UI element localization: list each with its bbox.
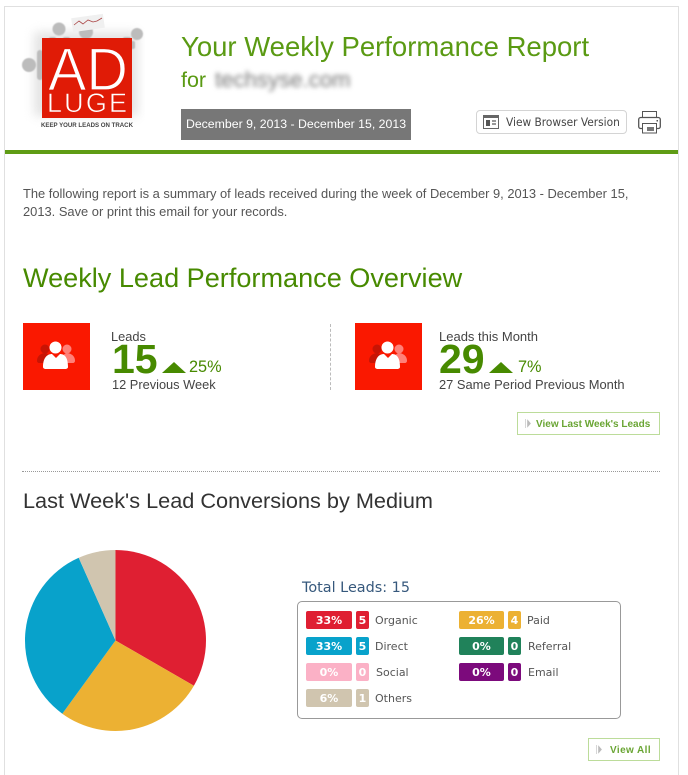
logo xyxy=(22,14,144,129)
legend: paid: Paid xyxy=(527,614,550,627)
slice: organic xyxy=(116,550,206,686)
legend: organic xyxy=(306,611,418,629)
legend: social: 0% xyxy=(320,666,338,679)
slice: others xyxy=(79,550,116,640)
red logo square xyxy=(42,38,132,118)
legend: organic: 5 xyxy=(359,614,366,627)
legend: email xyxy=(459,663,559,681)
legend: paid: 4 xyxy=(511,614,518,627)
metric label: Leads this Month xyxy=(439,329,538,344)
view last week's leads button: View Last Week's Leads xyxy=(536,419,650,430)
date range badge xyxy=(181,109,411,140)
metric label: Leads xyxy=(111,329,146,344)
up arrow xyxy=(489,362,513,373)
percent change: 7% xyxy=(518,358,542,376)
legend: direct: Direct xyxy=(375,640,408,653)
logo shadow xyxy=(34,32,138,116)
section divider xyxy=(22,471,660,472)
metric value: 29 xyxy=(439,336,485,382)
legend: organic: 33% xyxy=(316,614,342,627)
same period previous month: 27 Same Period Previous Month xyxy=(439,377,625,392)
intro paragraph: The following report is a summary of leads received during the week of December 9, 2013 - December 15, xyxy=(23,186,628,201)
date range badge: December 9, 2013 - December 15, 2013 xyxy=(186,117,406,131)
slice: direct xyxy=(25,558,115,714)
legend: email: Email xyxy=(528,666,559,679)
view browser version button xyxy=(476,110,627,134)
icon: people on red square xyxy=(355,323,422,390)
legend panel xyxy=(297,601,621,719)
legend: social: 0 xyxy=(359,666,366,679)
legend: referral: 0% xyxy=(472,640,491,653)
vertical divider xyxy=(330,324,331,390)
section heading: overview: Weekly Lead Performance Overview xyxy=(23,262,462,293)
view all button: View All xyxy=(610,745,651,756)
legend: direct xyxy=(306,637,408,655)
section heading: conversions: Last Week's Lead Conversions by Medium xyxy=(23,488,433,513)
icon: figures holding the logo xyxy=(22,22,143,80)
icon: small chart sign xyxy=(71,14,105,32)
legend: others: Others xyxy=(375,692,412,705)
legend: direct: 33% xyxy=(316,640,342,653)
legend: email: 0 xyxy=(511,666,518,679)
legend: social xyxy=(306,663,409,681)
logo: KEEP YOUR LEADS ON TRACK xyxy=(41,122,133,129)
intro paragraph xyxy=(23,186,628,219)
legend: email: 0% xyxy=(472,666,491,679)
view last week's leads button xyxy=(517,412,660,435)
total leads label: Total Leads: 15 xyxy=(302,580,410,596)
legend: paid: 26% xyxy=(468,614,495,627)
panel: weekly leads xyxy=(23,323,222,392)
icon: people on red square xyxy=(23,323,90,390)
intro paragraph: 2013. Save or print this email for your records. xyxy=(23,204,287,219)
legend: referral xyxy=(459,637,571,655)
icon: browser window xyxy=(483,115,499,129)
legend: others: 6% xyxy=(320,692,338,705)
legend: organic: Organic xyxy=(375,614,418,627)
percent change: 25% xyxy=(189,358,222,376)
pie chart xyxy=(25,550,206,731)
button label: View Browser Version xyxy=(506,115,620,129)
legend: others xyxy=(306,689,412,707)
slice: paid xyxy=(62,640,194,731)
title: Your Weekly Performance Report xyxy=(181,31,589,62)
view all button xyxy=(588,738,660,761)
green header rule xyxy=(5,150,678,154)
logo: LUGE xyxy=(47,88,127,118)
metric value: 15 xyxy=(112,336,158,382)
panel: monthly leads xyxy=(355,323,625,392)
legend: referral: Referral xyxy=(528,640,571,653)
legend: referral: 0 xyxy=(511,640,518,653)
subtitle with blurred domain: techsyse.com xyxy=(215,67,351,92)
legend: paid xyxy=(459,611,550,629)
legend: social: Social xyxy=(376,666,409,679)
logo text: AD xyxy=(48,36,128,103)
legend: others: 1 xyxy=(359,692,366,705)
legend: direct: 5 xyxy=(359,640,366,653)
subtitle with blurred domain: for xyxy=(181,68,206,92)
icon: printer xyxy=(638,111,661,134)
up arrow xyxy=(162,362,186,373)
previous period: 12 Previous Week xyxy=(112,377,216,392)
